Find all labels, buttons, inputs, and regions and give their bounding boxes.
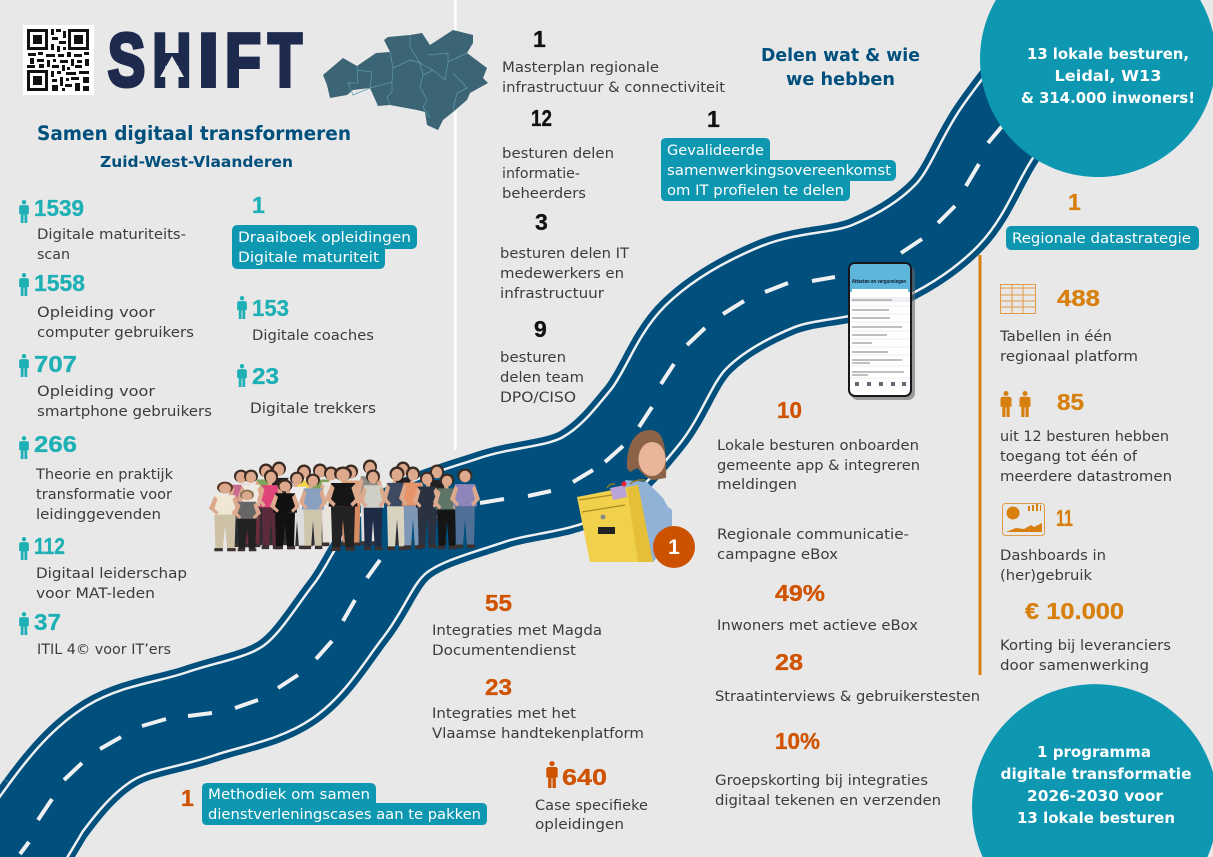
stat 112: Digitaal leiderschap — [36, 566, 187, 582]
stat: 55: Integraties met Magda — [432, 623, 602, 639]
draaiboek: Draaiboek opleidingen — [238, 230, 411, 246]
stat: onboarding: gemeente app & integreren — [717, 458, 920, 474]
stat: 640: opleidingen — [535, 817, 624, 833]
stat: 10% — [715, 728, 941, 809]
stat 153: 153 — [252, 295, 289, 321]
IT medewerkers: medewerkers en — [500, 266, 624, 282]
stat 1558: Opleiding voor — [37, 305, 155, 321]
stat: 10%: 10% — [775, 728, 820, 754]
stat: onboarding — [717, 397, 920, 493]
DPO CISO: 9 — [534, 316, 547, 342]
masterplan: infrastructuur & connectiviteit — [502, 80, 725, 96]
stat 266: leidinggevenden — [36, 507, 161, 523]
heading: delen: we hebben — [786, 69, 895, 90]
callout: samenwerkingsovereenkomst: om IT profielen te delen — [667, 183, 844, 199]
text: campagne — [717, 527, 909, 563]
text: campagne: campagne eBox — [717, 547, 838, 563]
badge 1: 1 — [668, 536, 680, 559]
stat korting — [1000, 598, 1171, 674]
IT medewerkers: 3 — [535, 209, 548, 235]
informatiebeheerders: informatie- — [502, 166, 580, 182]
stat 112: 112 — [34, 533, 65, 559]
draaiboek — [232, 192, 417, 269]
stat: 10%: digitaal tekenen en verzenden — [715, 793, 941, 809]
stat 488 — [999, 284, 1138, 365]
left column statistics — [19, 195, 212, 658]
stat 1539 — [19, 195, 186, 263]
stat: 49% — [717, 580, 918, 634]
stat 85 — [1000, 389, 1172, 485]
stat: 55: 55 — [485, 590, 512, 616]
hair — [627, 430, 666, 480]
draaiboek: Digitale maturiteit — [238, 250, 379, 266]
stat korting: € 10.000 — [1025, 598, 1124, 624]
stat 488: 488 — [1057, 285, 1100, 311]
group photo — [209, 460, 480, 551]
stat 707: smartphone gebruikers — [37, 404, 212, 420]
callout: methodiek: Methodiek om samen — [208, 787, 370, 803]
right column data strategy — [978, 189, 1199, 675]
stat: 23: Integraties met het — [432, 706, 576, 722]
draaiboek: 1 — [252, 192, 265, 218]
divider — [454, 0, 456, 450]
DPO CISO: besturen — [500, 350, 566, 366]
stat korting: Korting bij leveranciers — [1000, 638, 1171, 654]
masterplan — [502, 26, 725, 96]
logo SHIFT — [108, 18, 302, 102]
informatiebeheerders: 12 — [531, 105, 552, 131]
logo SHIFT: H — [152, 18, 191, 102]
bottom-right circle: 1 programma — [1037, 743, 1151, 761]
stat 707: 707 — [34, 351, 77, 377]
stat 23: Digitale trekkers — [250, 401, 376, 417]
stat 112 — [19, 533, 187, 602]
sharing column — [500, 26, 725, 406]
callout: samenwerkingsovereenkomst — [661, 106, 896, 201]
stat 85: 85 — [1057, 389, 1084, 415]
bottom-right circle: 2026-2030 voor — [1027, 787, 1163, 805]
IT medewerkers — [500, 209, 629, 302]
stat 707: Opleiding voor — [37, 384, 155, 400]
QR code — [23, 25, 94, 95]
denim shirt — [625, 480, 672, 562]
stat: onboarding: meldingen — [717, 477, 797, 493]
stat 85: meerdere datastromen — [1000, 469, 1172, 485]
stat 266 — [19, 431, 174, 523]
stat: 10%: Groepskorting bij integraties — [715, 773, 928, 789]
stat 11: Dashboards in — [1000, 548, 1106, 564]
stat 1558: computer gebruikers — [37, 325, 194, 341]
stat: 55 — [432, 590, 602, 659]
stat 488: regionaal platform — [1000, 349, 1138, 365]
heading datastrategie — [1006, 189, 1199, 250]
stat: onboarding: 10 — [777, 397, 802, 423]
stat 85: toegang tot één of — [1000, 449, 1138, 465]
woman with mailbox — [577, 430, 672, 562]
stat 85: uit 12 besturen hebben — [1000, 429, 1169, 445]
title — [37, 122, 351, 171]
informatiebeheerders — [502, 105, 614, 202]
logo SHIFT: S — [108, 18, 145, 102]
bottom-right circle: 13 lokale besturen — [1017, 809, 1175, 827]
face — [638, 442, 666, 476]
DPO CISO: DPO/CISO — [500, 390, 576, 406]
stat 707 — [19, 351, 212, 420]
callout: samenwerkingsovereenkomst: Gevalideerde — [667, 143, 764, 159]
stat 11 — [1000, 504, 1106, 584]
callout: methodiek — [181, 783, 487, 825]
stat 1558: 1558 — [34, 270, 85, 296]
heading: delen — [761, 45, 920, 90]
stat 153: Digitale coaches — [252, 328, 374, 344]
second column statistics — [232, 192, 417, 417]
stat 1539: scan — [37, 247, 70, 263]
informatiebeheerders: beheerders — [502, 186, 586, 202]
callout: samenwerkingsovereenkomst: samenwerkingsovereenkomst — [667, 163, 891, 179]
phone — [848, 262, 915, 400]
top-right circle: 13 lokale besturen, — [1027, 45, 1189, 63]
stat 1539: 1539 — [34, 195, 84, 221]
stat: 23 — [432, 674, 644, 742]
stat 23: 23 — [252, 363, 279, 389]
stat 266: Theorie en praktijk — [35, 467, 174, 483]
stat: 23: Vlaamse handtekenplatform — [432, 726, 644, 742]
map of the region — [323, 30, 488, 130]
badge 1 — [653, 526, 695, 568]
stat: 49%: Inwoners met actieve eBox — [717, 618, 918, 634]
title: Zuid-West-Vlaanderen — [100, 153, 293, 171]
heading: delen: Delen wat & wie — [761, 45, 920, 66]
stat 488: Tabellen in één — [999, 329, 1112, 345]
DPO CISO: delen team — [500, 370, 584, 386]
top-right circle — [980, 0, 1213, 177]
stat: 55: Documentendienst — [432, 643, 576, 659]
DPO CISO — [500, 316, 584, 406]
logo SHIFT: F — [225, 18, 261, 102]
callout: samenwerkingsovereenkomst: 1 — [707, 106, 720, 132]
callout: methodiek: dienstverleningscases aan te pakken — [208, 807, 481, 823]
text: campagne: Regionale communicatie- — [717, 527, 909, 543]
stat: 28: Straatinterviews & gebruikerstesten — [715, 689, 980, 705]
stat 11: 11 — [1056, 505, 1073, 531]
stat: 28 — [715, 649, 980, 705]
stat: 23: 23 — [485, 674, 512, 700]
IT medewerkers: infrastructuur — [500, 286, 604, 302]
stat 266: transformatie voor — [36, 487, 172, 503]
mailbox — [577, 485, 653, 562]
stat 23 — [237, 363, 376, 417]
stat korting: door samenwerking — [1000, 658, 1149, 674]
bottom-right circle — [972, 684, 1213, 857]
masterplan: Masterplan regionale — [502, 60, 659, 76]
logo SHIFT: I — [198, 18, 219, 102]
stat 1539: Digitale maturiteits- — [37, 227, 186, 243]
masterplan: 1 — [533, 26, 546, 52]
bottom-right circle: digitale transformatie — [1000, 765, 1192, 783]
heading datastrategie: Regionale datastrategie — [1012, 231, 1191, 247]
stat: 49%: 49% — [775, 580, 825, 606]
stat: 640: Case specifieke — [535, 798, 648, 814]
stat 37 — [19, 609, 171, 658]
callout: methodiek: 1 — [181, 785, 194, 811]
stat 37: 37 — [34, 609, 61, 635]
stat 37: ITIL 4© voor IT’ers — [37, 642, 171, 658]
stat 11: (her)gebruik — [1000, 568, 1093, 584]
stat: 28: 28 — [775, 649, 803, 675]
logo SHIFT: T — [268, 18, 302, 102]
stat: 640 — [535, 761, 648, 833]
stat 112: voor MAT-leden — [36, 586, 155, 602]
stat 153 — [237, 295, 374, 344]
top-right circle: Leidal, W13 — [1054, 67, 1162, 85]
top-right circle: & 314.000 inwoners! — [1021, 89, 1195, 107]
title: Samen digitaal transformeren — [37, 122, 351, 145]
informatiebeheerders: besturen delen — [502, 146, 614, 162]
stat 266: 266 — [34, 431, 77, 457]
stat: 640: 640 — [562, 764, 607, 790]
IT medewerkers: besturen delen IT — [500, 246, 629, 262]
stat 1558 — [19, 270, 194, 341]
heading datastrategie: 1 — [1068, 189, 1081, 215]
phone: Attesten en vergunningen — [852, 279, 906, 285]
orange divider — [978, 255, 982, 675]
stat: onboarding: Lokale besturen onboarden — [717, 438, 919, 454]
